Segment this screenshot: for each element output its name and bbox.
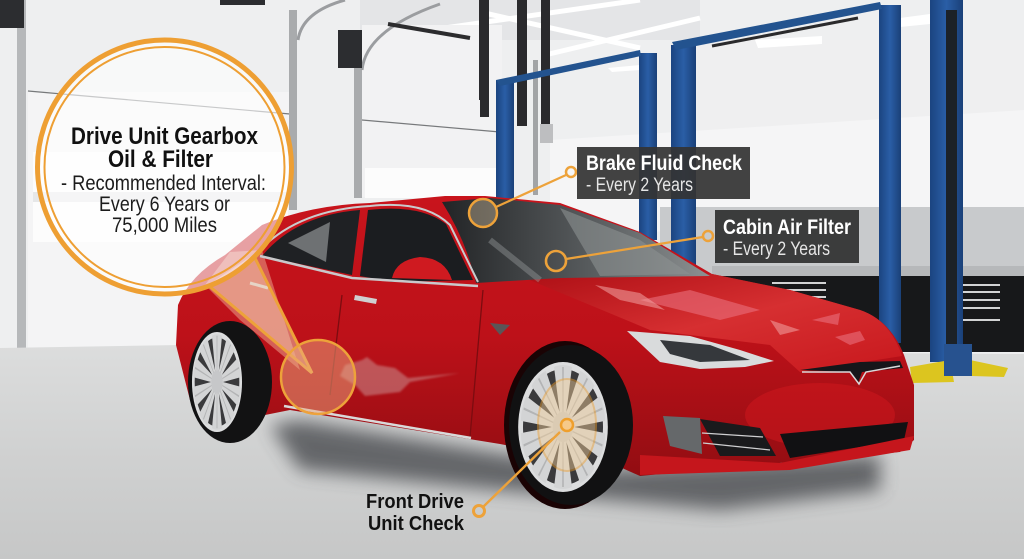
- headlight: [627, 331, 774, 369]
- door handles and trim: [354, 295, 377, 304]
- bonnet: [520, 274, 902, 372]
- tool cabinets: [712, 266, 1024, 352]
- rear quarter highlight: [205, 250, 300, 370]
- car: [176, 196, 914, 509]
- label: front drive unit: Unit Check: [368, 513, 465, 535]
- vehicle lifts: [496, 0, 1008, 383]
- front splitter: [640, 436, 914, 475]
- floor: [0, 345, 1024, 559]
- side windows: [262, 210, 360, 275]
- front wheel: [504, 341, 633, 509]
- label: cabin air filter: [715, 210, 859, 263]
- grille nose: [800, 361, 903, 383]
- gearbox ghost: [340, 357, 460, 396]
- main callout: drive unit gearbox: 75,000 Miles: [112, 214, 217, 237]
- main callout: drive unit gearbox: Oil & Filter: [108, 146, 213, 173]
- label: cabin air filter: - Every 2 Years: [723, 239, 830, 260]
- car body: [176, 196, 914, 476]
- main callout: drive unit gearbox: Every 6 Years or: [99, 193, 230, 216]
- label: cabin air filter: Cabin Air Filter: [723, 216, 851, 239]
- mirror: [392, 257, 452, 280]
- rear wheel: [188, 321, 272, 443]
- label: brake fluid: Brake Fluid Check: [586, 152, 742, 175]
- label: brake fluid: - Every 2 Years: [586, 175, 693, 196]
- lower intakes: [700, 419, 776, 456]
- front wheel hub highlight: [538, 379, 596, 471]
- door seams: [330, 290, 483, 437]
- label: brake fluid: [577, 147, 750, 199]
- leader: cabin air: [546, 231, 713, 271]
- gearbox magnifier wedge: [208, 255, 355, 414]
- windshield: [442, 198, 710, 283]
- label: front drive unit: Front Drive: [366, 491, 464, 513]
- main callout: drive unit gearbox: - Recommended Interval:: [61, 172, 266, 195]
- car shadow: [270, 420, 880, 510]
- main callout: drive unit gearbox: [38, 40, 292, 294]
- exhaust hoses: [479, 0, 553, 195]
- label: front drive unit: [366, 491, 465, 535]
- main callout: drive unit gearbox: Drive Unit Gearbox: [71, 123, 259, 150]
- leader: front drive: [474, 432, 560, 516]
- garage doors: [0, 0, 502, 348]
- leader: brake fluid: [469, 167, 576, 227]
